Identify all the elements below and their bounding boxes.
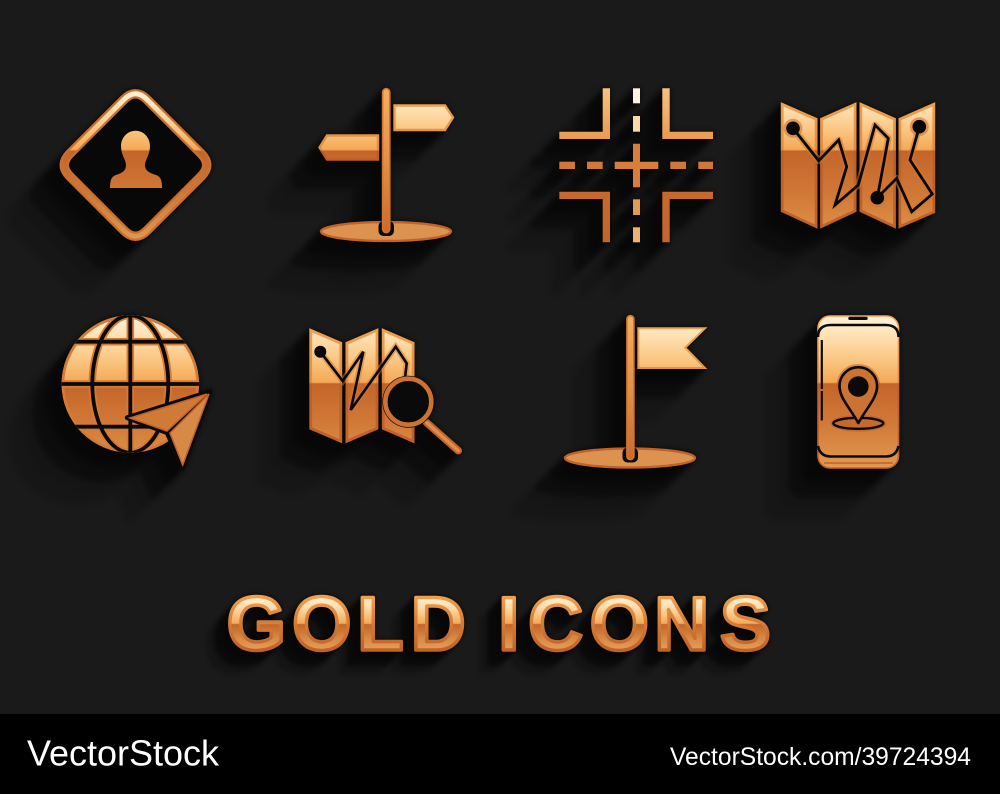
icon: crossroads [559, 88, 713, 242]
heading: gold icons: GOLD ICONS [227, 582, 771, 667]
brand wordmark: VectorStock [27, 732, 220, 774]
image id: VectorStock.com/39724394 [670, 743, 971, 771]
icon: road sign with person [64, 94, 207, 236]
icon: signpost [320, 89, 453, 241]
icon: smartphone with location pin [818, 316, 898, 468]
icon: globe with paper plane [55, 310, 210, 468]
icon: map with magnifying glass [311, 330, 458, 451]
icon: folded route map [782, 104, 934, 226]
footer bar [0, 714, 1000, 794]
icon: flag on ground [565, 316, 705, 467]
